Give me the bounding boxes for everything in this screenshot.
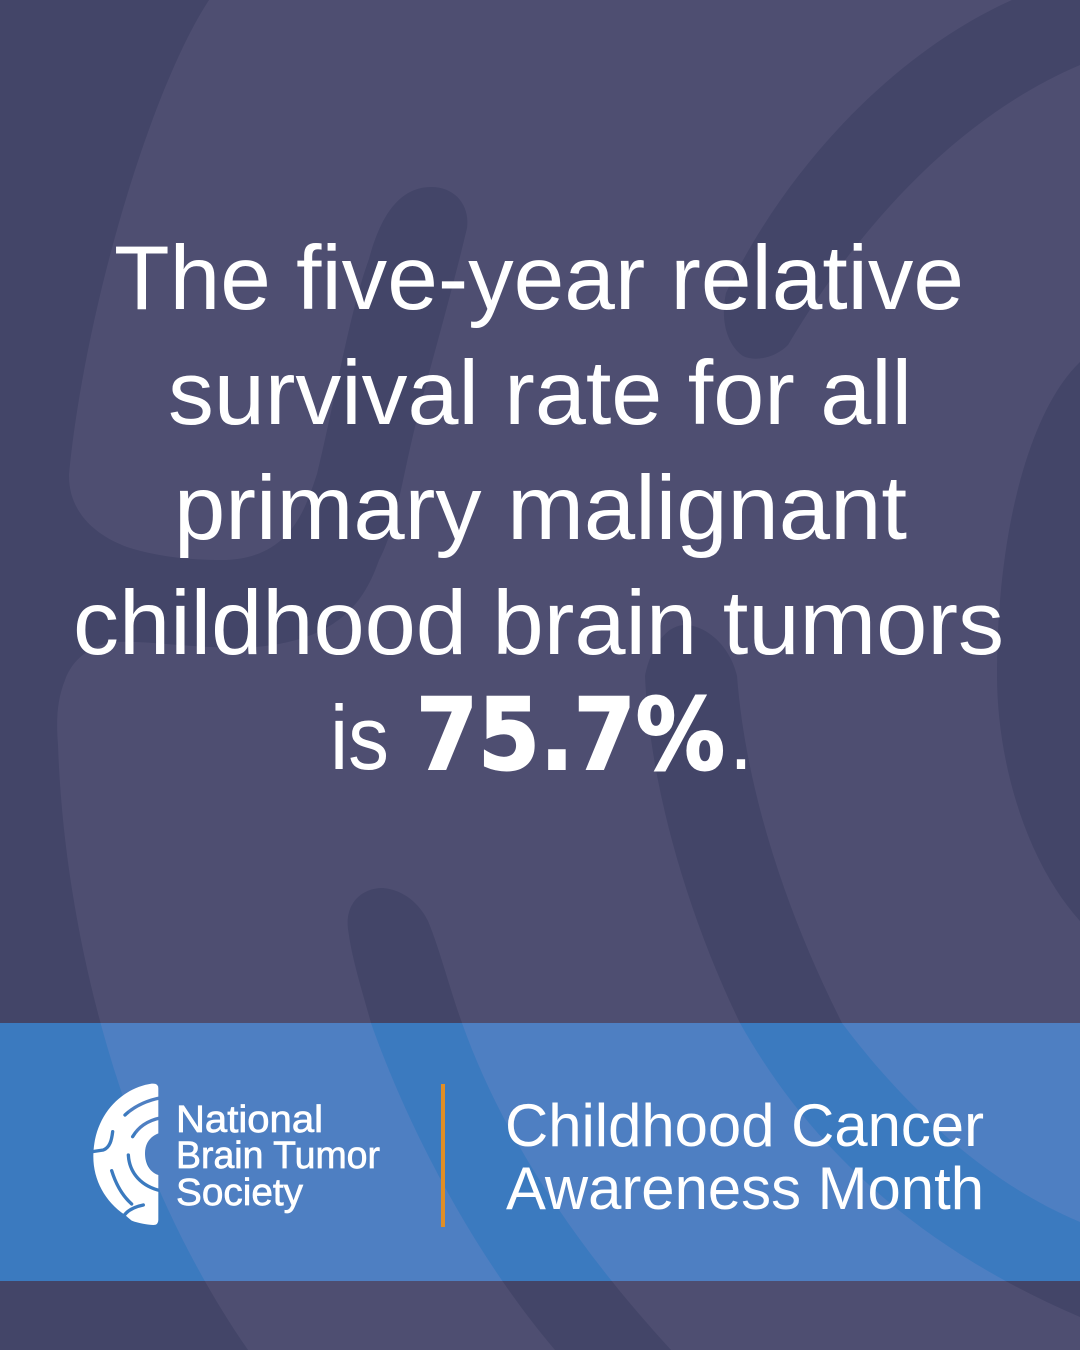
- headline statistic text: primary malignant: [174, 458, 907, 559]
- campaign title: [505, 1092, 984, 1222]
- headline statistic text: is: [330, 688, 389, 789]
- headline statistic text: survival rate for all: [168, 343, 912, 444]
- campaign title: Childhood Cancer: [505, 1092, 984, 1159]
- headline statistic text: [73, 228, 1004, 793]
- icon: brain half-circle mark: [93, 1084, 158, 1225]
- headline statistic text: childhood brain tumors: [73, 573, 1004, 674]
- footer blue band: [0, 1023, 1080, 1281]
- headline statistic text: 75.7%: [416, 678, 725, 793]
- headline statistic text: .: [729, 688, 753, 789]
- logo wordmark: [176, 1099, 380, 1214]
- campaign title: Awareness Month: [506, 1155, 984, 1222]
- logo: National Brain Tumor Society: [93, 1084, 380, 1225]
- logo wordmark: Brain Tumor: [176, 1135, 380, 1177]
- headline statistic text: The five-year relative: [114, 228, 964, 329]
- logo wordmark: National: [176, 1099, 323, 1141]
- orange divider: [441, 1084, 445, 1227]
- logo wordmark: Society: [176, 1172, 303, 1214]
